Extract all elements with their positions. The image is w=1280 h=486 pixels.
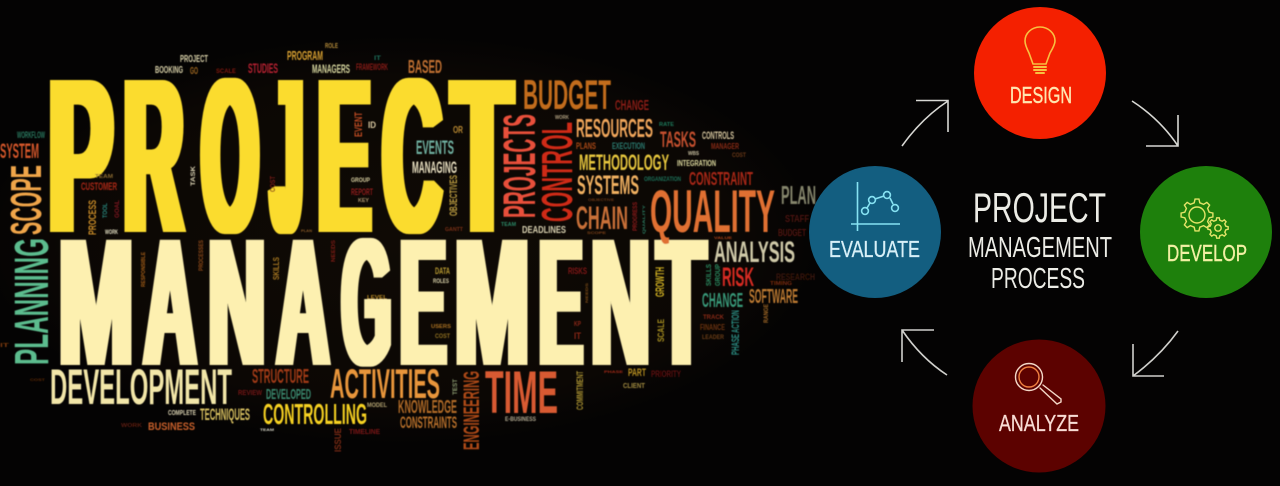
heading: PROJECT: P bbox=[49, 32, 113, 279]
large keywords: DEVELOPMENT bbox=[50, 359, 232, 415]
tiny background keywords: GROWTH bbox=[653, 267, 667, 297]
tiny background keywords: PHASE bbox=[730, 334, 742, 355]
center title: project management process bbox=[968, 184, 1112, 295]
tiny background keywords: KP bbox=[574, 321, 581, 328]
tiny background keywords: OR bbox=[453, 125, 464, 136]
large keywords: STRUCTURE bbox=[252, 366, 309, 388]
tiny background keywords: RESPONSIBLE bbox=[141, 251, 147, 287]
tiny background keywords: ROLE bbox=[325, 43, 338, 50]
tiny background keywords: ACTION bbox=[730, 310, 742, 333]
tiny background keywords: VALUE bbox=[714, 235, 732, 240]
tiny background keywords: WORK bbox=[555, 115, 569, 121]
large keywords: ANALYSIS bbox=[714, 236, 795, 269]
center title: project management process: PROJECT bbox=[973, 184, 1106, 231]
tiny background keywords: GANTT bbox=[445, 227, 463, 233]
tiny background keywords: PLANS bbox=[576, 141, 596, 151]
tiny background keywords bbox=[0, 43, 815, 452]
tiny background keywords: IT bbox=[574, 331, 581, 341]
heading: PROJECT bbox=[49, 32, 512, 279]
tiny background keywords: COST bbox=[30, 377, 46, 382]
heading: MANAGEMENT: N bbox=[208, 200, 265, 404]
large keywords: BASED bbox=[408, 57, 442, 77]
tiny background keywords: STUDIES bbox=[248, 60, 278, 76]
tiny background keywords: IT bbox=[374, 56, 381, 62]
icon: magnifying glass bbox=[1016, 364, 1061, 404]
process cycle panel bbox=[809, 7, 1272, 472]
center title: project management process: PROCESS bbox=[991, 263, 1085, 295]
tiny background keywords: TASK bbox=[191, 165, 197, 186]
heading: MANAGEMENT: G bbox=[342, 200, 391, 404]
step: EVALUATE bbox=[809, 166, 941, 298]
step: DESIGN bbox=[974, 7, 1106, 139]
tiny background keywords: PLAN bbox=[301, 228, 312, 233]
large keywords: RESOURCES bbox=[576, 113, 653, 143]
tiny background keywords: BUDGET bbox=[778, 228, 806, 239]
tiny background keywords: OBJECTIVE bbox=[588, 197, 614, 202]
tiny background keywords: MANAGER bbox=[711, 142, 739, 151]
tiny background keywords: TEAM bbox=[260, 427, 275, 432]
tiny background keywords: NEEDS bbox=[584, 283, 589, 303]
tiny background keywords: CUSTOMER bbox=[81, 181, 117, 193]
large keywords: CONSTRAINT bbox=[689, 169, 753, 189]
tiny background keywords: LEADER bbox=[702, 335, 725, 341]
infographic canvas: PLAN bbox=[781, 180, 816, 210]
tiny background keywords: ISSUE bbox=[333, 428, 343, 452]
tiny background keywords: PROGRESS bbox=[633, 202, 639, 231]
step: DESIGN: DESIGN bbox=[1010, 82, 1072, 108]
tiny background keywords: USERS bbox=[431, 324, 452, 330]
tiny background keywords: RANGE bbox=[764, 304, 770, 323]
tiny background keywords: QUALITY bbox=[641, 204, 646, 234]
word cloud panel: T bbox=[452, 32, 512, 279]
tiny background keywords: E-BUSINESS bbox=[505, 417, 536, 423]
tiny background keywords: ORGANIZATION bbox=[644, 177, 681, 183]
tiny background keywords: SCOPE bbox=[587, 230, 606, 235]
large keywords: TECHNIQUES bbox=[200, 405, 250, 424]
word cloud panel bbox=[0, 32, 816, 452]
large keywords: BUSINESS bbox=[148, 421, 195, 433]
tiny background keywords: RISKS bbox=[568, 266, 587, 276]
tiny background keywords: TOOL bbox=[103, 203, 109, 218]
tiny background keywords: TIMING bbox=[770, 281, 792, 287]
large keywords: CHANGE bbox=[702, 290, 743, 312]
tiny background keywords: GO bbox=[190, 66, 198, 77]
tiny background keywords: WORKFLOW bbox=[17, 130, 45, 140]
tiny background keywords: SKILLS bbox=[272, 256, 281, 280]
arrow: analyze to evaluate bbox=[902, 330, 947, 375]
tiny background keywords: BOOKING bbox=[155, 65, 183, 76]
large keywords: TIME bbox=[485, 359, 558, 426]
arrow: develop to analyze bbox=[1133, 331, 1178, 376]
large keywords: CONSTRAINTS bbox=[400, 413, 457, 432]
icon: light bulb bbox=[1025, 27, 1055, 73]
tiny background keywords: COST bbox=[732, 153, 746, 159]
tiny background keywords: TRACK bbox=[703, 315, 725, 321]
heading: MANAGEMENT: N bbox=[591, 200, 650, 404]
tiny background keywords: CONTROLS bbox=[702, 130, 734, 142]
tiny background keywords: COMPLETE bbox=[168, 410, 196, 417]
tiny background keywords: TEAM bbox=[95, 174, 113, 180]
tiny background keywords: DATA bbox=[435, 266, 450, 276]
tiny background keywords: GOAL bbox=[115, 200, 121, 218]
tiny background keywords: ID bbox=[368, 120, 376, 130]
large keywords: SOFTWARE bbox=[749, 286, 798, 308]
heading: MANAGEMENT: A bbox=[144, 200, 196, 404]
center title: project management process: MANAGEMENT bbox=[968, 232, 1112, 264]
icon: gears bbox=[1181, 199, 1228, 238]
tiny background keywords: PROGRAM bbox=[287, 48, 323, 63]
tiny background keywords: GROUP bbox=[715, 264, 722, 286]
heading: MANAGEMENT: E bbox=[400, 200, 446, 404]
heading: PROJECT: C bbox=[383, 32, 441, 279]
tiny background keywords: SCALE bbox=[216, 69, 236, 75]
tiny background keywords: RESEARCH bbox=[776, 272, 815, 282]
large keywords: SYSTEMS bbox=[577, 170, 639, 200]
step: EVALUATE: EVALUATE bbox=[829, 236, 920, 262]
large keywords: ENGINEERING bbox=[459, 371, 484, 450]
tiny background keywords: PROJECT bbox=[180, 54, 208, 65]
tiny background keywords: REVIEW bbox=[238, 390, 262, 397]
large keywords: ACTIVITIES bbox=[330, 360, 440, 407]
tiny background keywords: LEVEL bbox=[367, 295, 387, 301]
tiny background keywords: PROCESSES bbox=[199, 240, 205, 271]
tiny background keywords: MANAGERS bbox=[312, 62, 350, 76]
heading: PROJECT: J bbox=[272, 32, 302, 279]
large keywords: PLANNING bbox=[6, 238, 59, 365]
tiny background keywords: TEAM bbox=[501, 222, 516, 228]
large keywords bbox=[0, 57, 816, 450]
tiny background keywords: NEEDS bbox=[331, 239, 337, 262]
arrow: evaluate to design bbox=[902, 100, 948, 146]
large keywords: CHAIN bbox=[576, 200, 628, 236]
tiny background keywords: WORK bbox=[121, 423, 142, 429]
step: DEVELOP: DEVELOP bbox=[1167, 240, 1247, 266]
tiny background keywords: STAFF bbox=[785, 214, 809, 225]
large keywords: DEVELOPED bbox=[266, 386, 311, 403]
icon: line chart bbox=[851, 182, 900, 231]
tiny background keywords: IT bbox=[0, 343, 9, 349]
tiny background keywords: COST bbox=[435, 334, 450, 340]
heading: PROJECT: O bbox=[202, 32, 258, 279]
tiny background keywords: EXECUTION bbox=[612, 141, 645, 151]
large keywords: BUDGET bbox=[523, 71, 611, 118]
large keywords: KNOWLEDGE bbox=[398, 397, 457, 417]
large keywords: SYSTEM bbox=[0, 140, 39, 163]
step: DEVELOP bbox=[1140, 166, 1272, 298]
heading: MANAGEMENT: A bbox=[277, 200, 329, 404]
tiny background keywords: MODEL bbox=[367, 403, 387, 409]
large keywords: SCOPE bbox=[2, 165, 51, 235]
large keywords: TASKS bbox=[660, 127, 696, 152]
tiny background keywords: PROCESS bbox=[87, 200, 99, 235]
tiny background keywords: PRIORITY bbox=[651, 369, 681, 379]
tiny background keywords: WORK bbox=[105, 230, 118, 236]
step: ANALYZE: ANALYZE bbox=[999, 410, 1079, 436]
tiny background keywords: TIMELINE bbox=[349, 429, 380, 436]
heading: MANAGEMENT: E bbox=[539, 200, 582, 404]
tiny background keywords: TEST bbox=[453, 379, 459, 395]
large keywords: EVENTS bbox=[416, 138, 454, 159]
tiny background keywords: CLIENT bbox=[623, 383, 646, 390]
tiny background keywords: KEY bbox=[358, 198, 370, 204]
tiny background keywords: REPORT bbox=[351, 187, 373, 197]
step: ANALYZE bbox=[972, 340, 1106, 472]
tiny background keywords: SKILLS bbox=[706, 264, 713, 286]
tiny background keywords: FINANCE bbox=[700, 323, 725, 332]
heading: PROJECT: R bbox=[124, 32, 183, 279]
tiny background keywords: COMMITMENT bbox=[575, 371, 585, 410]
tiny background keywords: FRAMEWORK bbox=[356, 62, 388, 72]
tiny background keywords: OBJECTIVES bbox=[448, 175, 460, 216]
tiny background keywords: WBS bbox=[688, 151, 700, 157]
heading: MANAGEMENT bbox=[58, 200, 705, 404]
tiny background keywords: DEADLINES bbox=[522, 225, 566, 236]
tiny background keywords: COST bbox=[270, 175, 277, 192]
tiny background keywords: PART bbox=[628, 367, 646, 379]
tiny background keywords: ROLES bbox=[433, 279, 449, 285]
tiny background keywords: EVENT bbox=[353, 112, 365, 137]
tiny background keywords: PHASE bbox=[604, 369, 623, 374]
word cloud panel: T bbox=[657, 200, 705, 404]
tiny background keywords: INTEGRATION bbox=[677, 159, 716, 168]
tiny background keywords: RATE bbox=[659, 122, 675, 128]
large keywords: METHODOLOGY bbox=[579, 150, 669, 175]
heading: MANAGEMENT: M bbox=[454, 200, 530, 404]
tiny background keywords: CHANGE bbox=[615, 97, 649, 114]
tiny background keywords: SCALE bbox=[656, 319, 666, 342]
tiny background keywords: GROUP bbox=[351, 178, 370, 184]
large keywords: MANAGING bbox=[412, 158, 457, 177]
arrow: design to develop bbox=[1132, 101, 1178, 146]
large keywords: RISK bbox=[722, 262, 754, 292]
heading: PROJECT: E bbox=[318, 32, 370, 279]
large keywords: CONTROL bbox=[533, 122, 582, 222]
large keywords: QUALITY bbox=[650, 178, 775, 245]
heading: MANAGEMENT: M bbox=[58, 200, 134, 404]
large keywords: CONTROLLING bbox=[263, 399, 367, 431]
